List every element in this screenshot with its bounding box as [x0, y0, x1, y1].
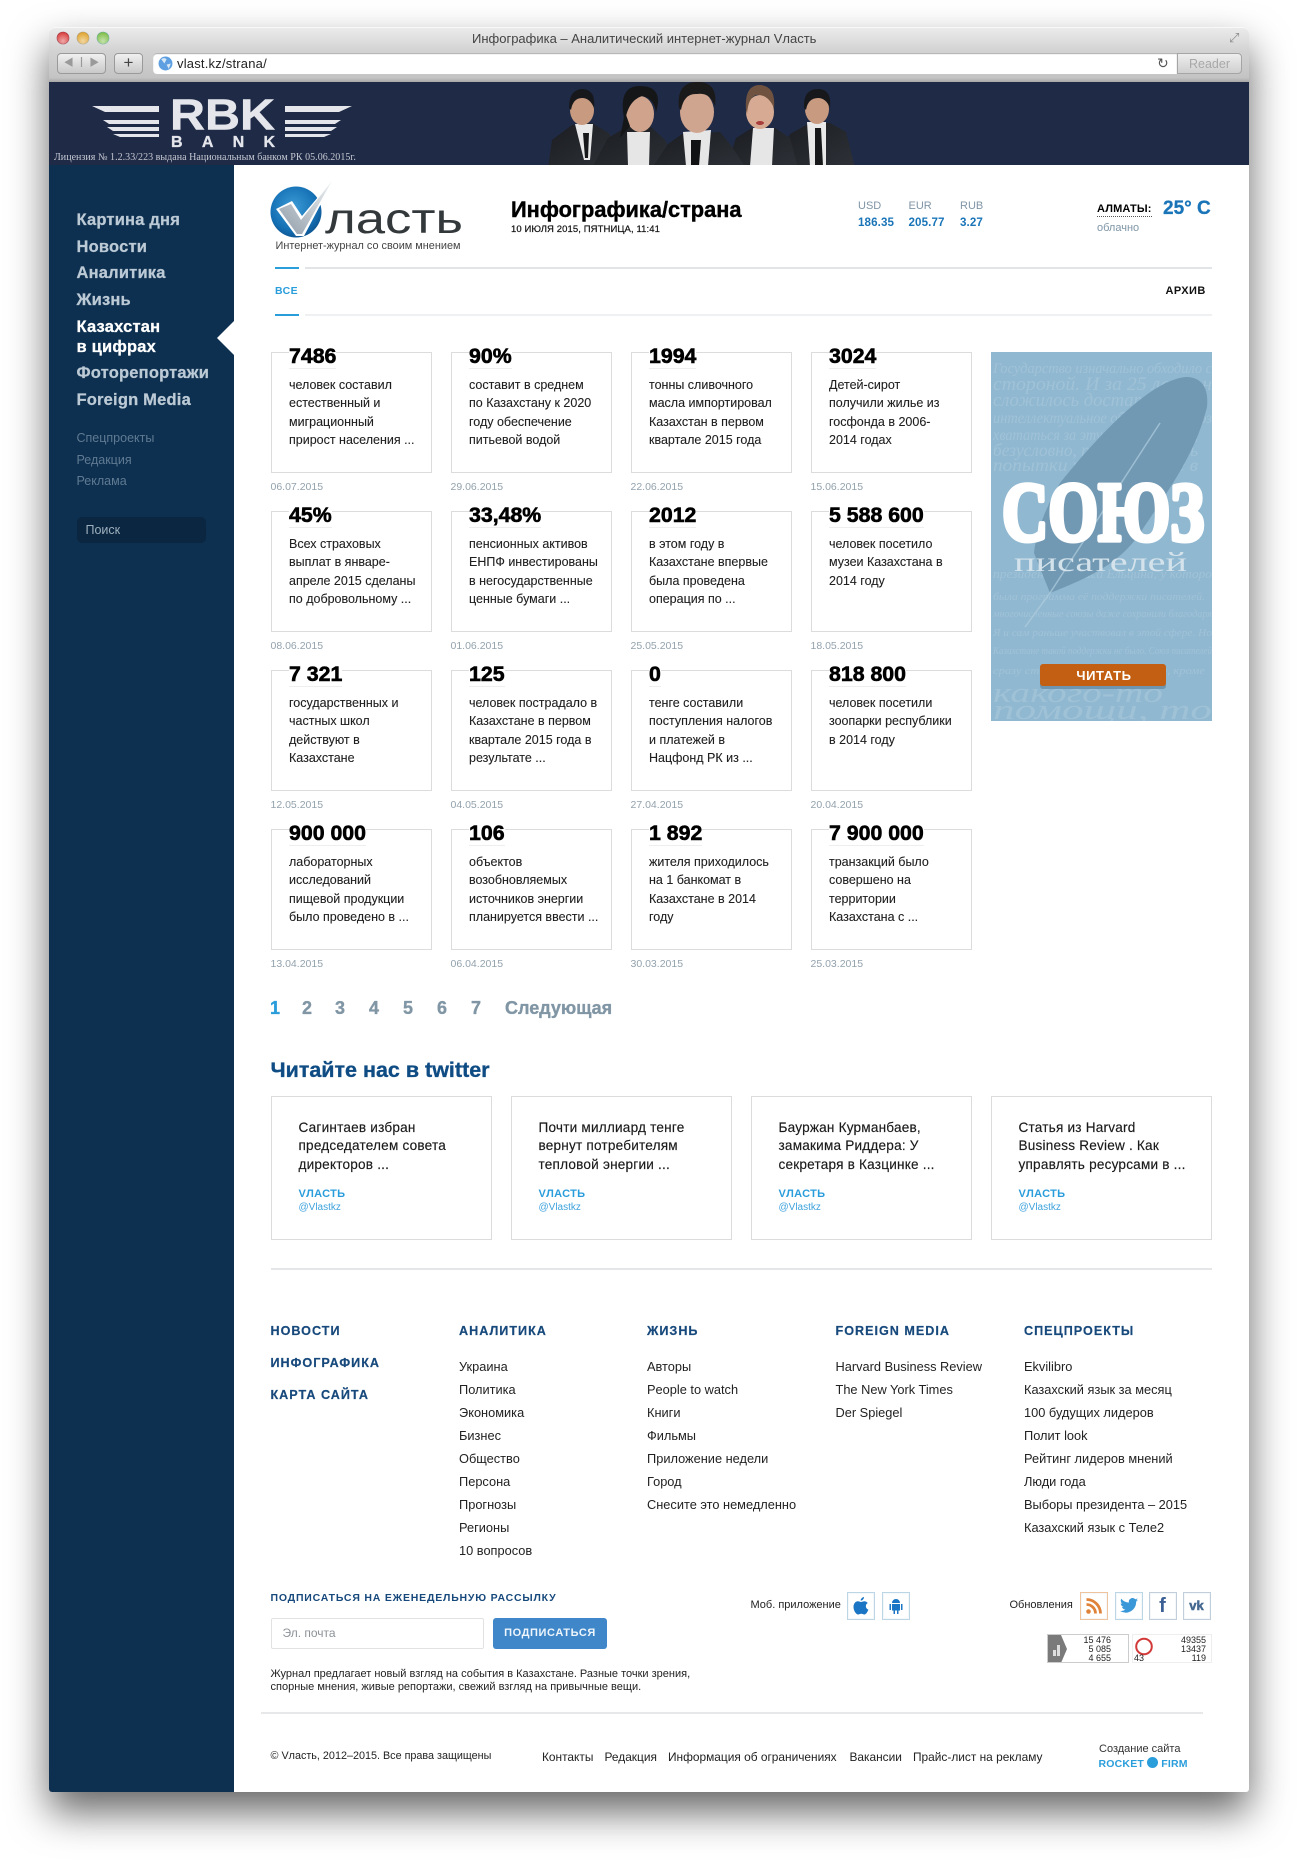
tweet card: [990, 1096, 1212, 1240]
infographic card: Казахстан в первом: [649, 415, 764, 429]
next page: Следующая: [505, 998, 612, 1018]
ad banner: Союз писателей: попытки нужно. Даже в: [992, 455, 1198, 475]
infographic card: составит в среднем: [469, 378, 584, 392]
infographic card: апреле 2015 сделаны: [289, 574, 415, 588]
infographic card: Казахстане: [289, 751, 355, 765]
counter numbers: 15 476: [1083, 1635, 1111, 1645]
infographic card: Казахстана с ...: [829, 910, 918, 924]
icon: vkontakte: [1182, 1592, 1210, 1620]
infographic card: [450, 820, 612, 970]
copyright: © Vласть, 2012–2015. Все права защищены: [270, 1750, 491, 1762]
icon: vkontakte: vk: [1189, 1598, 1204, 1612]
nav item: Аналитика: [76, 264, 166, 282]
infographic card: [450, 662, 612, 811]
Vlast logo: ласть: [325, 195, 463, 243]
rating rank: 43: [1134, 1652, 1144, 1662]
infographic card: 45%: [289, 502, 332, 526]
bottom links: [542, 1749, 1042, 1765]
infographic card: тонны сливочного: [649, 378, 753, 392]
icon: facebook: f: [1159, 1594, 1166, 1616]
rating numbers: [1181, 1636, 1206, 1664]
RUB: 3.27: [960, 216, 983, 229]
infographic card: музеи Казахстана в: [829, 555, 943, 569]
infographic card: транзакций было: [829, 855, 929, 869]
pagination: [270, 998, 612, 1018]
browser toolbar: [49, 27, 1249, 82]
infographic card: в 2014 году: [829, 733, 895, 747]
infographic card: [450, 344, 612, 493]
infographic card: по Казахстану к 2020: [469, 396, 591, 410]
infographic card: квартале 2015 года: [649, 433, 761, 447]
USD: 186.35: [858, 216, 894, 229]
column links: Ekvilibro: [1024, 1358, 1072, 1374]
link: НОВОСТИ: [270, 1324, 340, 1338]
footer: standalone links: [270, 1324, 380, 1402]
page 4: 4: [369, 998, 379, 1018]
infographic card: была проведена: [649, 574, 745, 588]
active nav item: в цифрах: [76, 338, 156, 356]
RBK logo: [92, 90, 352, 151]
active item pointer: [217, 321, 234, 355]
tweet card: VЛАСТЬ: [538, 1188, 585, 1200]
updates label: Обновления: [1010, 1599, 1073, 1611]
city: АЛМАТЫ:: [1097, 203, 1152, 215]
tab bar: [275, 267, 1212, 316]
active nav item: Казахстан: [76, 318, 160, 336]
url: vlast.kz/strana/: [177, 56, 267, 71]
infographic card: лабораторных: [289, 855, 373, 869]
infographic card: пенсионных активов: [469, 537, 588, 551]
column heading: СПЕЦПРОЕКТЫ: [1024, 1324, 1134, 1338]
main nav items: Картина дня: [76, 211, 180, 229]
page 3: 3: [335, 998, 345, 1018]
column links: Выборы президента – 2015: [1024, 1497, 1187, 1512]
infographic card: 900 000: [289, 820, 366, 844]
tweet card: @Vlastkz: [298, 1202, 341, 1213]
infographic card: действуют в: [289, 733, 360, 747]
search box: [76, 516, 206, 542]
weather: [1097, 198, 1211, 234]
infographic card: [810, 820, 972, 970]
infographic card: 01.06.2015: [450, 640, 503, 652]
infographic card: [270, 344, 432, 493]
subscribe button: ПОДПИСАТЬСЯ: [504, 1627, 596, 1639]
infographic card: 15.06.2015: [810, 481, 863, 493]
ad banner: Союз писателей: президенте Бориса Ельцина, у которо: [992, 566, 1212, 581]
tweet card: @Vlastkz: [538, 1202, 581, 1213]
icon: android: [882, 1592, 910, 1620]
link: КАРТА САЙТА: [270, 1388, 369, 1402]
infographic card: [810, 662, 972, 811]
newsletter heading: ПОДПИСАТЬСЯ НА ЕЖЕНЕДЕЛЬНУЮ РАССЫЛКУ: [270, 1592, 556, 1604]
USD: USD: [858, 200, 881, 212]
ad banner: Союз писателей: Я и сам раньше участвовал в этой сфере. Но: [991, 627, 1212, 639]
page 1: 1: [270, 998, 280, 1018]
infographic card: операция по ...: [649, 592, 736, 606]
infographic card: питьевой водой: [469, 433, 560, 447]
temperature: 25° C: [1163, 198, 1211, 219]
reload icon: ↻: [1157, 55, 1169, 71]
infographic card: государственных и: [289, 696, 398, 710]
red ring: [1134, 1637, 1154, 1656]
nav item: Новости: [76, 238, 147, 256]
column links: [1024, 1354, 1187, 1539]
nav item: Фоторепортажи: [76, 364, 209, 382]
infographic card: результате ...: [469, 751, 546, 765]
infographic card: 3024: [829, 344, 876, 368]
tweet card: директоров ...: [298, 1157, 389, 1172]
infographic card: прирост населения ...: [289, 433, 414, 447]
ad banner: Союз писателей: стороной. И за 25 лет у н: [992, 374, 1212, 395]
Vlast logo: [270, 182, 463, 252]
infographic card: Нацфонд РК из ...: [649, 751, 753, 765]
infographic card: и платежей в: [649, 733, 725, 747]
secondary nav item: Редакция: [76, 452, 132, 466]
sidebar navigation: [49, 165, 234, 1792]
RBK logo: BANK: [171, 134, 275, 151]
page 6: 6: [437, 998, 447, 1018]
column links: Книги: [647, 1405, 680, 1420]
tweet card: @Vlastkz: [778, 1202, 821, 1213]
infographic card: совершено на: [829, 873, 911, 887]
ad banner: Союз писателей: какого-то: [992, 678, 1162, 709]
infographic card: пищевой продукции: [289, 892, 404, 906]
counter widget: rating: [1132, 1634, 1212, 1663]
traffic lights: [56, 32, 110, 44]
tweet card: Бауржан Курманбаев,: [778, 1120, 921, 1135]
infographic card: 818 800: [829, 662, 906, 686]
link: Вакансии: [850, 1750, 902, 1764]
infographic card: [630, 820, 792, 970]
column links: The New York Times: [836, 1382, 953, 1397]
add tab button: [114, 53, 143, 74]
newsletter form: [270, 1588, 690, 1696]
infographic card: 106: [469, 820, 505, 844]
infographic card: 06.07.2015: [270, 481, 323, 493]
rocket firm logo: ROCKET FIRM: [1098, 1758, 1188, 1770]
infographic card: ценные бумаги ...: [469, 592, 570, 606]
column links: Украина: [459, 1358, 508, 1374]
infographic card: миграционный: [289, 415, 374, 429]
twitter heading: Читайте нас в twitter: [270, 1058, 490, 1082]
link: Редакция: [604, 1750, 657, 1764]
description: Журнал предлагает новый взгляд на события в Казахстане. Разные точки зрения,: [270, 1668, 690, 1680]
link: Контакты: [542, 1750, 593, 1764]
currency rates: [858, 200, 983, 229]
infographic card: ЕНПФ инвестированы: [469, 555, 598, 569]
column links: Общество: [459, 1451, 520, 1466]
tweet card: [510, 1096, 732, 1240]
column links: Персона: [459, 1474, 510, 1489]
infographic card: возобновляемых: [469, 873, 567, 887]
tweet card: [750, 1096, 972, 1240]
infographic card: году: [649, 910, 674, 924]
licence text: Лицензия № 1.2.33/223 выдана Национальным банком РК 05.06.2015г.: [54, 152, 356, 163]
EUR: [908, 200, 945, 229]
infographic card: [810, 344, 972, 493]
infographic card: году обеспечение: [469, 415, 572, 429]
window title: Инфографика – Аналитический интернет-журнал Vласть: [472, 31, 816, 46]
column links: Бизнес: [459, 1428, 501, 1443]
infographic card: Казахстане в первом: [469, 714, 591, 728]
tweet card: Business Review . Как: [1018, 1138, 1159, 1153]
column links: Экономика: [459, 1405, 524, 1420]
subscribe button: [493, 1618, 607, 1649]
tweet card: управлять ресурсами в ...: [1018, 1157, 1186, 1172]
condition: облачно: [1097, 222, 1139, 234]
page 7: 7: [471, 998, 481, 1018]
reader button: [1177, 53, 1242, 74]
column links: Рейтинг лидеров мнений: [1024, 1451, 1173, 1466]
ad banner: Союз писателей: была программа её поддержки писателей.: [992, 591, 1204, 603]
infographic card: исследований: [289, 873, 371, 887]
infographic card: выплат в январе-: [289, 555, 390, 569]
infographic card: 30.03.2015: [630, 958, 683, 970]
link: Информация об ограничениях: [668, 1750, 837, 1764]
infographic card: объектов: [469, 855, 522, 869]
infographic card: Казахстане впервые: [649, 555, 768, 569]
infographic card: [630, 344, 792, 493]
address bar: [153, 53, 1177, 74]
footer column: foreign media: [836, 1324, 982, 1420]
infographic card: [630, 502, 792, 652]
column links: Казахский язык с Теле2: [1024, 1520, 1164, 1535]
infographic card: человек посетило: [829, 537, 932, 551]
Vlast logo: Интернет-журнал со своим мнением: [276, 240, 460, 252]
infographic card: [270, 502, 432, 652]
page 5: 5: [403, 998, 413, 1018]
ad banner: Союз писателей: писателей: [1014, 547, 1186, 577]
ad banner: Союз писателей: сложилось достаточно: [992, 390, 1182, 411]
infographic card: источников энергии: [469, 892, 583, 906]
infographic card: 12.05.2015: [270, 799, 323, 811]
email input: Эл. почта: [282, 1626, 336, 1640]
infographic card: 25.05.2015: [630, 640, 683, 652]
column links: [459, 1358, 532, 1558]
footer column: special projects: [1024, 1324, 1187, 1535]
RUB: [960, 200, 983, 229]
column links: [647, 1358, 796, 1512]
tweet card: секретаря в Казцинке ...: [778, 1157, 935, 1172]
ad banner: Союз писателей: сразу становится нужным всем, кроме: [992, 665, 1205, 677]
infographic card: [810, 502, 972, 652]
infographic card: жителя приходилось: [649, 855, 769, 869]
infographic card: получили жилье из: [829, 396, 940, 410]
infographic card: 7486: [289, 344, 336, 368]
infographic card: Казахстане в 2014: [649, 892, 756, 906]
EUR: 205.77: [908, 216, 945, 229]
infographic card: 13.04.2015: [270, 958, 323, 970]
fullscreen icon: ⤢: [1229, 30, 1239, 45]
infographic card: территории: [829, 892, 896, 906]
tweet card: председателем совета: [298, 1138, 446, 1153]
infographic card: человек посетили: [829, 696, 932, 710]
active nav item: [76, 318, 160, 356]
infographic card: 29.06.2015: [450, 481, 503, 493]
column heading: FOREIGN MEDIA: [836, 1324, 950, 1338]
infographic card: зоопарки республики: [829, 714, 952, 728]
column links: Прогнозы: [459, 1497, 516, 1512]
description: [270, 1668, 690, 1694]
column links: 10 вопросов: [459, 1543, 532, 1558]
back and forward buttons: [57, 53, 106, 74]
infographic card: тенге составили: [649, 696, 743, 710]
icon: facebook: [1148, 1592, 1176, 1620]
infographic card: в этом году в: [649, 537, 724, 551]
counter numbers: [1083, 1636, 1111, 1664]
infographic card: в негосударственные: [469, 574, 593, 588]
infographic card: 25.03.2015: [810, 958, 863, 970]
tweet card: @Vlastkz: [1018, 1202, 1061, 1213]
tweet card: VЛАСТЬ: [778, 1188, 825, 1200]
infographic card: госфонда в 2006-: [829, 415, 930, 429]
column links: Полит look: [1024, 1428, 1088, 1443]
sidebar menu: [76, 211, 234, 543]
ad banner: Союз писателей: ЧИТАТЬ: [1076, 668, 1131, 683]
infographic card: 1994: [649, 344, 696, 368]
infographic card: человек составил: [289, 378, 392, 392]
five people photo: [548, 82, 854, 165]
tweet card: Сагинтаев избран: [298, 1120, 416, 1135]
page heading: Инфографика/страна: [511, 197, 742, 222]
column links: Фильмы: [647, 1428, 696, 1443]
column links: Приложение недели: [647, 1451, 768, 1466]
infographic card: 5 588 600: [829, 502, 924, 526]
search box: Поиск: [86, 522, 120, 536]
infographic card: 0: [649, 662, 661, 686]
rating numbers: 13437: [1181, 1644, 1206, 1654]
column links: Снесите это немедленно: [647, 1497, 796, 1512]
RUB: RUB: [960, 200, 983, 212]
ad banner: Союз писателей: [991, 352, 1212, 721]
infographic card: 18.05.2015: [810, 640, 863, 652]
secondary nav item: Реклама: [76, 474, 127, 488]
counter chevron: [1048, 1635, 1068, 1663]
mobile app label: Моб. приложение: [750, 1599, 841, 1611]
infographic card: 2014 годах: [829, 433, 892, 447]
tab: all: ВСЕ: [275, 285, 298, 297]
infographic card: 27.04.2015: [630, 799, 683, 811]
footer column: analytics: [459, 1324, 547, 1558]
infographic card: по добровольному ...: [289, 592, 411, 606]
infographic card: 08.06.2015: [270, 640, 323, 652]
tweet card: VЛАСТЬ: [298, 1188, 345, 1200]
column links: Город: [647, 1474, 682, 1489]
infographic card: квартале 2015 года в: [469, 733, 591, 747]
icon: rss: [1080, 1592, 1108, 1620]
site credit: [1098, 1742, 1192, 1772]
nav item: Жизнь: [76, 291, 131, 309]
infographic card: 22.06.2015: [630, 481, 683, 493]
infographic card: [630, 662, 792, 811]
infographic card: частных школ: [289, 714, 370, 728]
nav item: Foreign Media: [76, 391, 191, 409]
column links: Политика: [459, 1382, 516, 1397]
globe icon: [158, 56, 172, 70]
column links: Авторы: [647, 1358, 691, 1374]
tweet card: Статья из Harvard: [1018, 1120, 1135, 1135]
infographic card: 2014 году: [829, 574, 885, 588]
ad banner: Союз писателей: безусловно, предпринимать: [992, 440, 1198, 460]
infographic card: [270, 662, 432, 811]
tweet card: тепловой энергии ...: [538, 1157, 670, 1172]
column heading: АНАЛИТИКА: [459, 1324, 547, 1338]
page 2: 2: [302, 998, 312, 1018]
infographic card: 20.04.2015: [810, 799, 863, 811]
tweet card: [270, 1096, 492, 1240]
link: Прайс-лист на рекламу: [913, 1750, 1042, 1764]
column heading: ЖИЗНЬ: [647, 1324, 698, 1338]
infographic card: планируется ввести ...: [469, 910, 598, 924]
infographic card: 2012: [649, 502, 696, 526]
column links: [836, 1358, 982, 1420]
tab: archive: АРХИВ: [1166, 285, 1206, 297]
description: спорные мнения, живые репортажи, свежий взгляд на привычные вещи.: [270, 1681, 641, 1693]
back and forward buttons: ◀ ┃ ▶: [64, 58, 99, 69]
infographic card: 125: [469, 662, 505, 686]
EUR: EUR: [908, 200, 932, 212]
add tab button: +: [124, 53, 133, 72]
column links: People to watch: [647, 1382, 738, 1397]
infographic card: человек пострадало в: [469, 696, 597, 710]
infographic card: 7 321: [289, 662, 342, 686]
infographic card: 1 892: [649, 820, 702, 844]
footer column: life: [646, 1324, 796, 1512]
infographic card: [450, 502, 612, 652]
tweet card: замакима Риддера: У: [778, 1138, 919, 1153]
column links: Люди года: [1024, 1474, 1086, 1489]
USD: [858, 200, 894, 229]
rating numbers: 49355: [1181, 1635, 1206, 1645]
infographic card: 7 900 000: [829, 820, 924, 844]
tweet card: Почти миллиард тенге: [538, 1120, 684, 1135]
infographic card: на 1 банкомат в: [649, 873, 741, 887]
counter numbers: 5 085: [1088, 1644, 1111, 1654]
icon: twitter: [1114, 1592, 1142, 1620]
infographic card: Детей-сирот: [829, 378, 900, 392]
RBK logo: RBK: [170, 90, 275, 140]
infographic card: 04.05.2015: [450, 799, 503, 811]
column links: Регионы: [459, 1520, 509, 1535]
email input: [270, 1618, 484, 1649]
icon: apple: [847, 1592, 875, 1620]
infographic card: 06.04.2015: [450, 958, 503, 970]
link: ИНФОГРАФИКА: [270, 1356, 380, 1370]
column links: Der Spiegel: [836, 1405, 902, 1420]
column links: Harvard Business Review: [836, 1358, 982, 1374]
reader button: Reader: [1189, 57, 1230, 71]
infographic card: масла импортировал: [649, 396, 772, 410]
column links: Казахский язык за месяц: [1024, 1382, 1172, 1397]
tweet card: вернут потребителям: [538, 1138, 678, 1153]
infographic card: 33,48%: [469, 502, 541, 526]
tweet card: VЛАСТЬ: [1018, 1188, 1065, 1200]
infographic card: 90%: [469, 344, 512, 368]
infographic card: [270, 820, 432, 970]
counter widget: liveinternet: [1047, 1634, 1129, 1663]
top banner: RBK Bank: [49, 82, 1249, 165]
credit label: Создание сайта: [1099, 1743, 1180, 1755]
secondary nav item: Спецпроекты: [76, 431, 154, 445]
infographic card: было проведено в ...: [289, 910, 409, 924]
infographic card: поступления налогов: [649, 714, 772, 728]
infographic card: Всех страховых: [289, 537, 381, 551]
infographic card: естественный и: [289, 396, 380, 410]
date line: 10 ИЮЛЯ 2015, ПЯТНИЦА, 11:41: [511, 224, 660, 234]
column links: 100 будущих лидеров: [1024, 1405, 1154, 1420]
